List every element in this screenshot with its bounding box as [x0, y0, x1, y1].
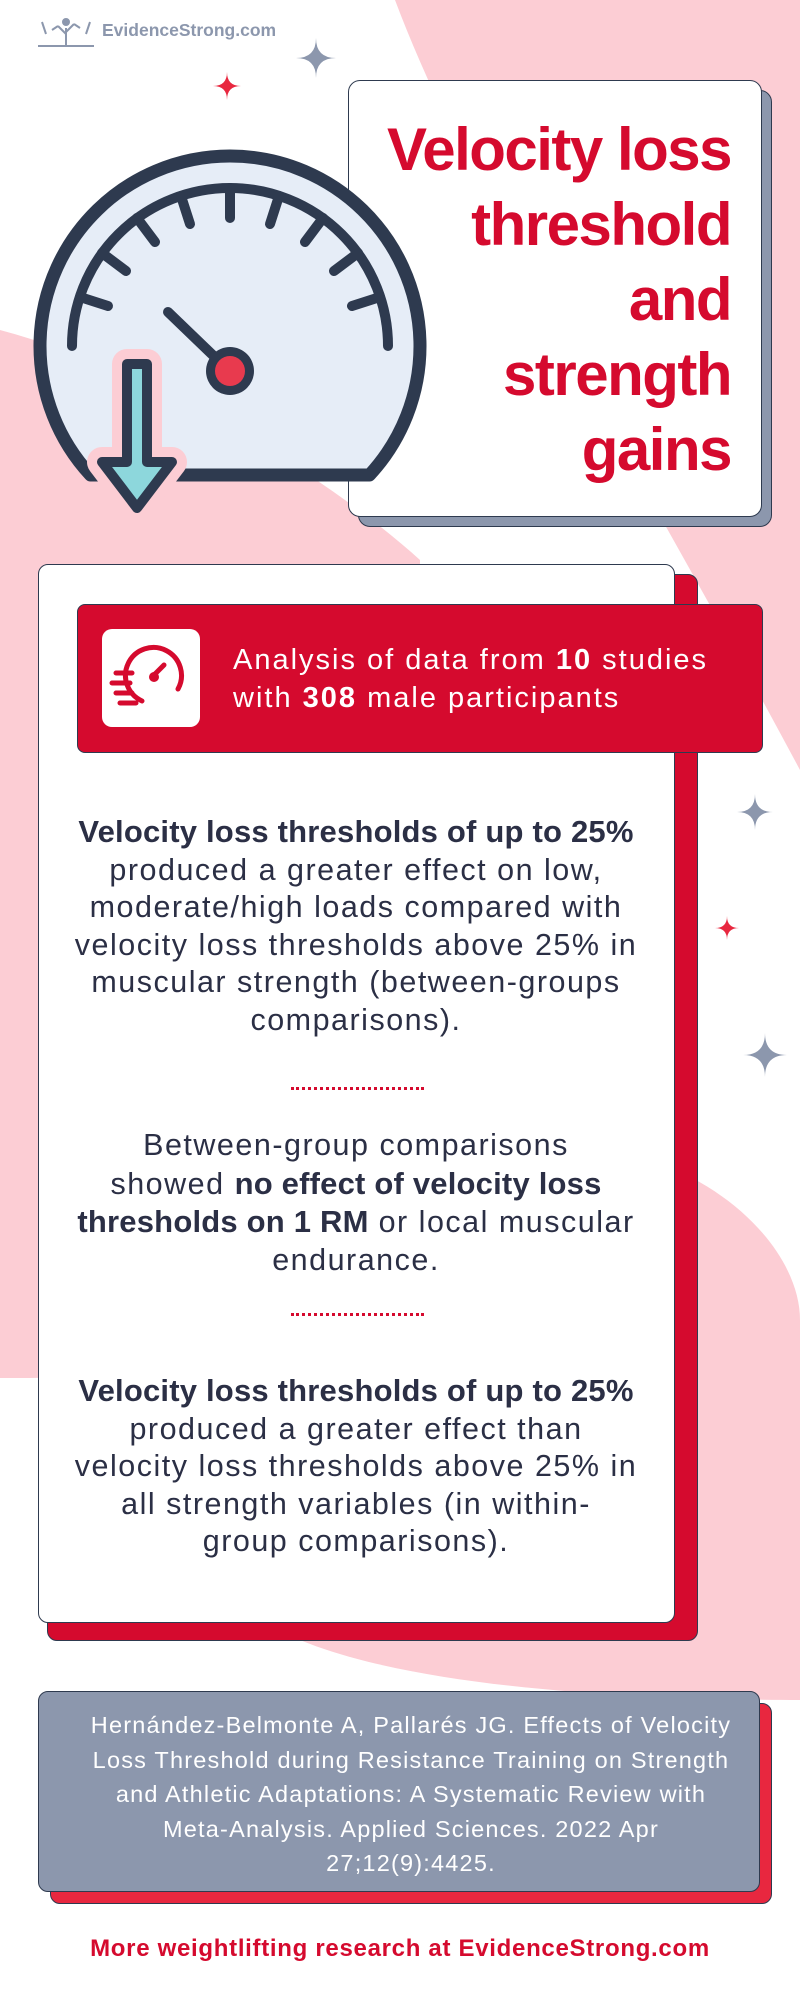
title: Velocity loss: [387, 116, 731, 183]
text block 1: Velocity loss thresholds of up to 25%: [78, 814, 634, 849]
text block 3: [74, 1373, 637, 1558]
text block 2: showed no effect of velocity loss: [110, 1166, 602, 1200]
callout: data summary: [77, 604, 763, 753]
header text: Analysis of data from 10 studies: [233, 644, 708, 676]
citation box: Hernández-Belmonte A, Pallarés JG. Effects of Velocity: [91, 1712, 731, 1738]
text block 2: endurance.: [272, 1242, 440, 1276]
text block 2: [77, 1128, 635, 1276]
title: [387, 116, 731, 483]
title: gains: [582, 416, 731, 483]
text block 3: Velocity loss thresholds of up to 25%: [78, 1373, 634, 1408]
citation box: Meta-Analysis. Applied Sciences. 2022 Apr: [163, 1816, 659, 1842]
header text: with 308 male participants: [233, 682, 620, 714]
text block 1: moderate/high loads compared with: [90, 890, 622, 924]
logo: [38, 18, 276, 47]
text block 1: produced a greater effect on low,: [109, 852, 603, 886]
citation box: [38, 1691, 772, 1904]
title: and: [629, 266, 731, 333]
footer: More weightlifting research at EvidenceStrong.com: [90, 1935, 710, 1962]
text block 3: all strength variables (in within-: [121, 1486, 591, 1520]
text block 1: [74, 814, 637, 1036]
text block 1: comparisons).: [250, 1002, 462, 1036]
logo: EvidenceStrong.com: [102, 20, 276, 40]
text block 2: thresholds on 1 RM or local muscular: [77, 1204, 635, 1239]
text block 3: produced a greater effect than: [129, 1412, 583, 1446]
icon: speed gauge: [102, 629, 200, 727]
title panel: [348, 80, 772, 527]
panel: main findings: [38, 564, 698, 1641]
citation box: 27;12(9):4425.: [326, 1850, 496, 1876]
text block 3: group comparisons).: [203, 1524, 509, 1558]
text block 3: velocity loss thresholds above 25% in: [75, 1449, 637, 1483]
icon: stars: [213, 38, 786, 1076]
text block 1: velocity loss thresholds above 25% in: [75, 928, 637, 962]
header text: [233, 644, 708, 714]
text block 1: muscular strength (between-groups: [91, 965, 621, 999]
title: strength: [503, 341, 731, 408]
citation box: Loss Threshold during Resistance Training on Strength: [93, 1746, 729, 1772]
citation box: and Athletic Adaptations: A Systematic Review with: [116, 1781, 706, 1807]
text block 2: Between-group comparisons: [143, 1128, 569, 1162]
icon: speedometer with down arrow: [34, 150, 426, 513]
title: threshold: [471, 191, 731, 258]
